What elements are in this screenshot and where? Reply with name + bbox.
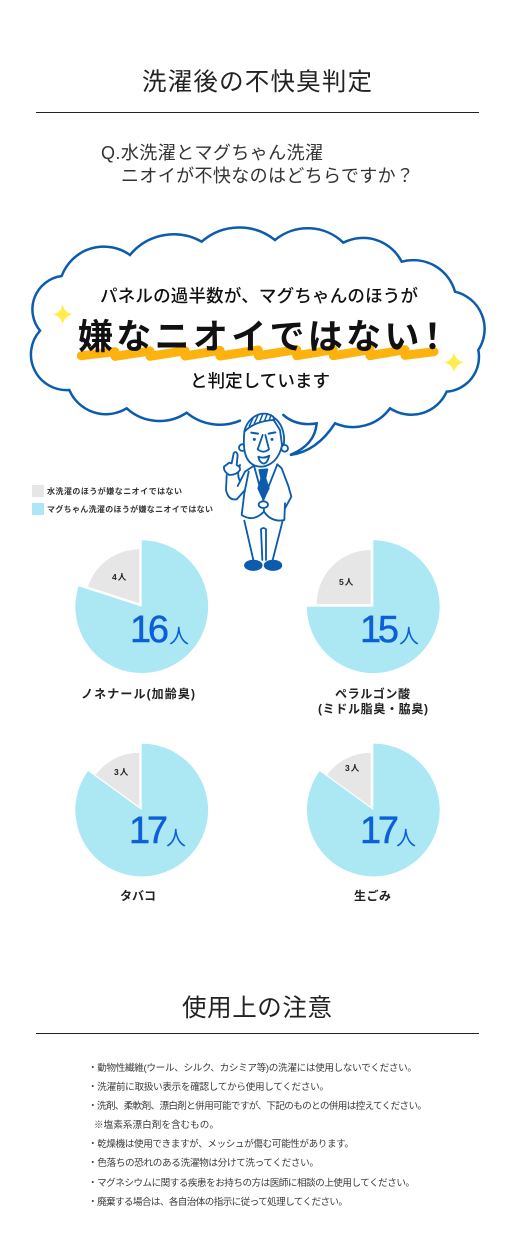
- pie chart: tobacco: 人: [166, 828, 186, 850]
- bubble text: パネルの過半数が、マグちゃんのほうが: [100, 286, 418, 306]
- caution list: ・色落ちの恐れのある洗濯物は分けて洗ってください。: [88, 1157, 319, 1169]
- caution list: ・洗濯前に取扱い表示を確認してから使用してください。: [88, 1081, 329, 1093]
- caution list: ・マグネシウムに関する疾患をお持ちの方は医師に相談の上使用してください。: [88, 1177, 415, 1189]
- pie chart: kitchen waste: 3人: [345, 763, 360, 773]
- pie chart: tobacco: 17: [129, 810, 168, 852]
- pie chart: nonenal: [75, 540, 208, 701]
- pie chart: pelargonic acid: 人: [399, 626, 419, 648]
- bubble text: [78, 286, 450, 391]
- pie chart: tobacco: タバコ: [120, 889, 156, 903]
- heading: odor test: 洗濯後の不快臭判定: [142, 68, 372, 96]
- caution list: [88, 1062, 427, 1208]
- pie chart: pelargonic acid: (ミドル脂臭・脇臭): [318, 701, 428, 716]
- pie chart: pelargonic acid: 15: [360, 609, 399, 651]
- caution list: ・乾燥機は使用できますが、メッシュが傷む可能性があります。: [88, 1138, 354, 1150]
- legend: マグちゃん洗濯のほうが嫌なニオイではない: [47, 504, 213, 514]
- marker underline: [81, 350, 434, 356]
- pie chart: nonenal: ノネナール(加齢臭): [81, 686, 195, 701]
- question text: Q.水洗濯とマグちゃん洗濯: [101, 143, 323, 163]
- sparkle right: [444, 352, 464, 372]
- bubble text: ！: [415, 318, 450, 357]
- pie chart: pelargonic acid: 5人: [339, 577, 354, 587]
- pie chart: nonenal: 人: [169, 626, 189, 648]
- pie chart: pelargonic acid: ペラルゴン酸: [335, 686, 410, 701]
- pie chart: tobacco: [75, 744, 208, 903]
- caution list: ・洗剤、柔軟剤、漂白剤と併用可能ですが、下記のものとの併用は控えてください。: [88, 1100, 427, 1112]
- bubble text: 嫌なニオイではない: [78, 318, 423, 357]
- caution list: ※塩素系漂白剤を含むもの。: [94, 1119, 219, 1131]
- legend: 水洗濯のほうが嫌なニオイではない: [47, 486, 182, 496]
- speech bubble: [31, 227, 485, 455]
- question text: [101, 143, 414, 186]
- pie chart: kitchen waste: 人: [396, 828, 416, 850]
- pie chart: kitchen waste: [307, 744, 440, 903]
- caution list: ・動物性繊維(ウール、シルク、カシミア等)の洗濯には使用しないでください。: [88, 1062, 417, 1074]
- pie chart: pelargonic acid: [307, 540, 440, 716]
- caution list: ・廃棄する場合は、各自治体の指示に従って処理してください。: [88, 1196, 348, 1208]
- pie chart: nonenal: 16: [130, 609, 169, 651]
- bubble text: と判定しています: [190, 371, 330, 391]
- pie chart: tobacco: 3人: [114, 767, 129, 777]
- pie chart: kitchen waste: 生ごみ: [354, 888, 391, 903]
- legend: [32, 485, 213, 515]
- pie chart: kitchen waste: 17: [360, 810, 399, 852]
- heading: usage cautions: 使用上の注意: [182, 994, 332, 1022]
- character: businessman pointing up: [224, 414, 291, 570]
- pie chart: nonenal: 4人: [112, 572, 127, 582]
- question text: ニオイが不快なのはどちらですか？: [121, 166, 414, 186]
- sparkle left: [53, 304, 73, 324]
